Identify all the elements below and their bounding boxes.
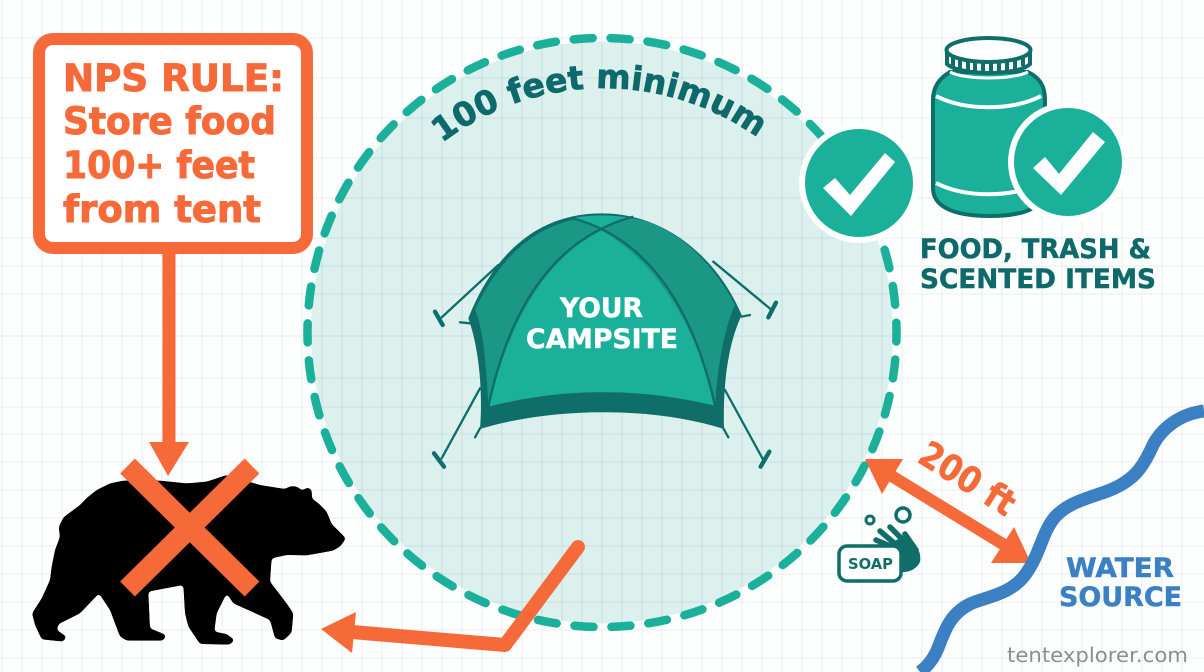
label: water source: SOURCE [1059, 582, 1182, 613]
tent label: CAMPSITE [526, 324, 678, 355]
NPS rule callout: Store food [63, 100, 276, 143]
label: food, trash and scented items [920, 234, 1156, 295]
icon: food jar [933, 38, 1045, 216]
NPS rule callout: from tent [63, 188, 261, 231]
label: water source: WATER [1066, 553, 1174, 584]
icon: soap and hand [839, 508, 920, 581]
NPS rule callout [39, 39, 307, 248]
NPS rule callout: 100+ feet [63, 144, 255, 187]
river [920, 411, 1204, 672]
check badge on jar [1008, 102, 1128, 222]
check badge on perimeter [799, 123, 919, 243]
label: food, trash and scented items: SCENTED ITEMS [920, 264, 1156, 295]
icon: soap and hand: SOAP [848, 555, 893, 573]
NPS rule callout: NPS RULE: [63, 57, 284, 100]
icon: bear silhouette [32, 475, 346, 645]
label: water source [1059, 553, 1182, 613]
arrow: callout to bear [149, 250, 189, 476]
arrow: tent to bear route [321, 547, 578, 653]
100 feet perimeter circle [303, 34, 901, 632]
tent label [526, 293, 678, 355]
watermark: tentexplorer.com [1007, 643, 1188, 667]
tent: your campsite [434, 213, 776, 467]
curved label: 100 feet minimum: 100 feet minimum [431, 64, 764, 142]
label: 200 ft: 200 ft [911, 434, 1023, 525]
label: food, trash and scented items: FOOD, TRASH & [920, 234, 1151, 265]
arrow: 200 ft distance [865, 459, 1031, 563]
tent label: YOUR [559, 293, 643, 324]
X mark over bear [128, 466, 252, 589]
